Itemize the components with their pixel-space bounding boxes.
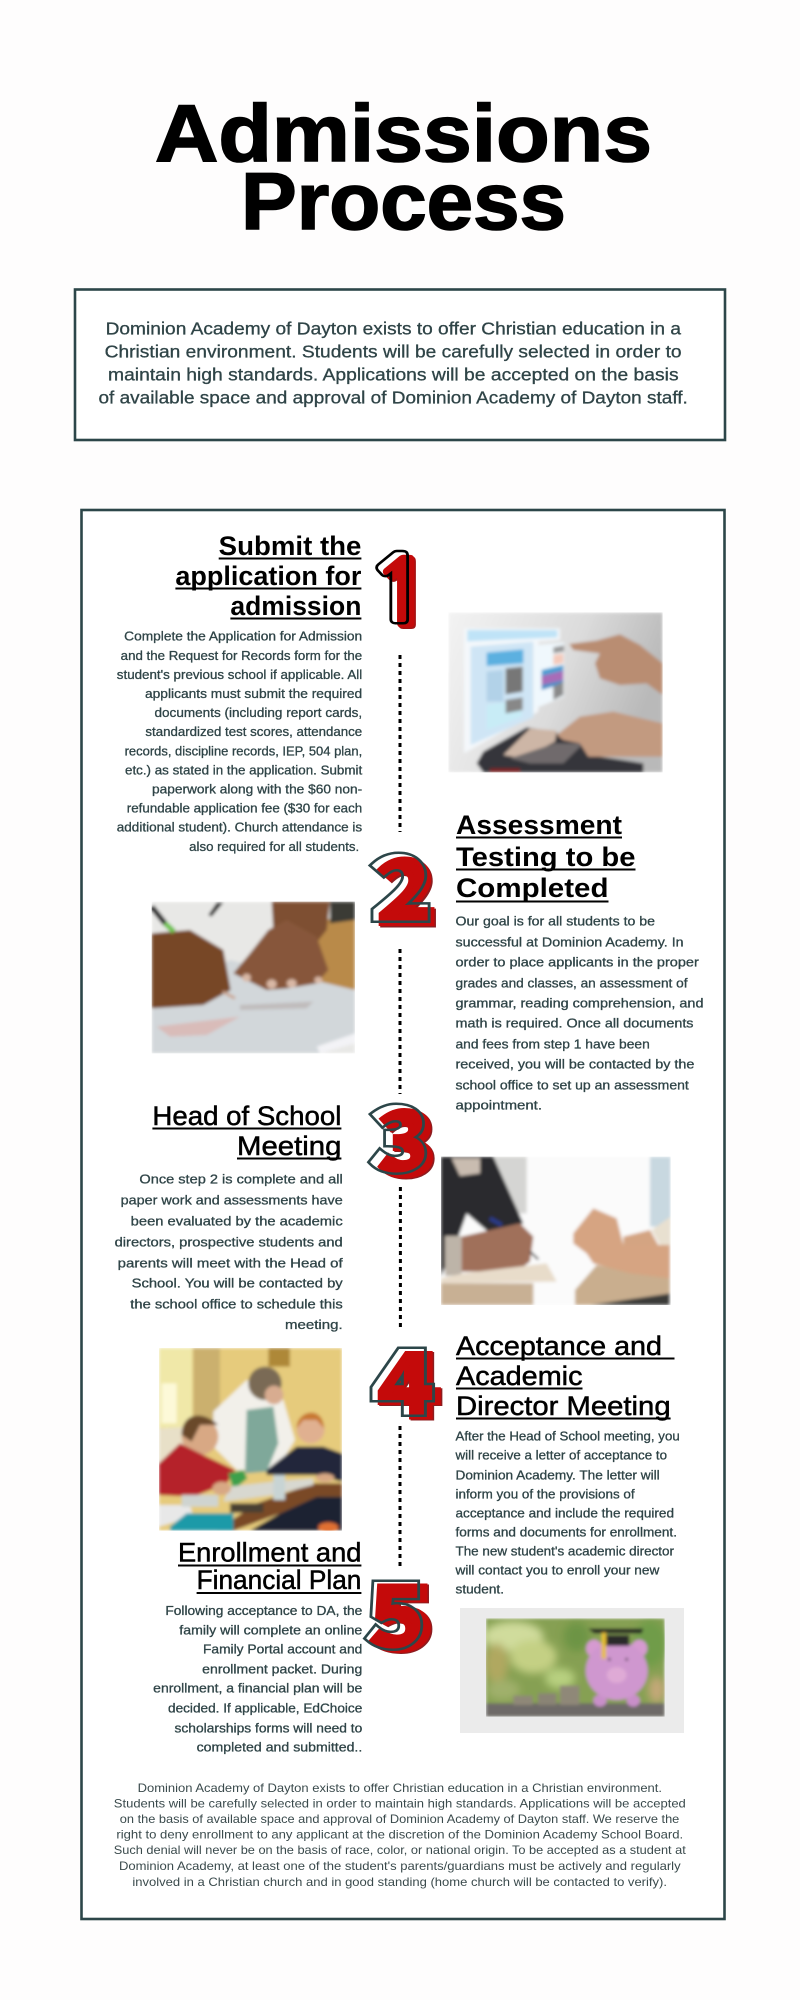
footer statement: Such denial will never be on the basis of race, color, or national origin. To be accepted as a student at (114, 1844, 687, 1857)
numeral 5: 5 (372, 1550, 434, 1675)
title (155, 89, 652, 247)
numeral 3: 3 (380, 1076, 436, 1200)
step 4 heading: Acceptance and (456, 1331, 662, 1361)
step 2 body text: school office to set up an assessment (456, 1077, 689, 1092)
numeral 4: 4 (379, 1316, 440, 1442)
step 2 body text: received, you will be contacted by the (456, 1056, 694, 1071)
footer statement: involved in a Christian church and in good standing (home church will be contacted to verify). (132, 1876, 667, 1889)
photo: teacher with two students at a table (159, 1348, 342, 1532)
step 5 body text: Family Portal account and (203, 1642, 362, 1657)
step 2 body text: appointment. (456, 1097, 542, 1112)
intro box: maintain high standards. Applications will be accepted on the basis (108, 364, 679, 384)
step 1 body text: etc.) as stated in the application. Submit (125, 762, 363, 777)
step 2 body text: order to place applicants in the proper (456, 955, 700, 970)
step 3 body text: been evaluated by the academic (131, 1213, 343, 1228)
title: Admissions (155, 89, 652, 179)
step 1 body text: also required for all students. (189, 839, 359, 854)
step 3 body text (115, 1171, 343, 1332)
numeral 4 (370, 1346, 442, 1420)
step 3 heading: Meeting (237, 1131, 341, 1161)
step 1 body text: additional student). Church attendance is (117, 820, 363, 835)
panel: admissions steps (82, 510, 724, 1919)
step 3 body text: directors, prospective students and (115, 1234, 343, 1249)
numeral 1: 1 (375, 552, 435, 640)
step 2 heading: Testing to be (456, 842, 636, 872)
step 5 body text: Following acceptance to DA, the (165, 1603, 362, 1618)
step 4 body text: will receive a letter of acceptance to (454, 1448, 667, 1463)
photo: hands on laptop with floating screen (448, 612, 663, 772)
step 1 body text: applicants must submit the required (145, 686, 362, 701)
step 1 body text (117, 629, 363, 854)
intro box (75, 290, 725, 440)
numeral 4: 4 (372, 1313, 433, 1438)
step 5 body text: completed and submitted.. (197, 1740, 362, 1755)
step 2 body text: Our goal is for all students to be (456, 914, 655, 929)
step 4 body text: Dominion Academy. The letter will (456, 1467, 660, 1482)
photo: piggy bank with graduation cap and coins (460, 1608, 684, 1733)
numeral 5: 5 (370, 1549, 433, 1674)
step 3 heading (152, 1101, 341, 1161)
footer statement: Dominion Academy, at least one of the student's parents/guardians must be actively and regularly (119, 1860, 681, 1873)
step 4 heading: Academic (456, 1361, 582, 1391)
step 3 body text: meeting. (285, 1317, 343, 1332)
step 1 heading: Submit the (219, 531, 361, 561)
numeral 5 (362, 1580, 432, 1654)
step 2 heading: Completed (456, 873, 608, 903)
numeral 3: 3 (370, 1070, 428, 1195)
numeral 5: 5 (366, 1546, 424, 1671)
step 4 body text: will contact you to enroll your new (454, 1563, 660, 1578)
step 2 heading: Assessment (456, 810, 622, 840)
footer statement: right to deny enrollment to any applicant at the discretion of the Dominion Academy School Board. (116, 1829, 683, 1842)
step 4 heading (456, 1331, 674, 1421)
step 3 body text: parents will meet with the Head of (118, 1255, 343, 1270)
numeral 3: 3 (379, 1074, 435, 1200)
numeral 2 (368, 852, 436, 928)
step 1 body text: student's previous school if applicable. All (117, 667, 362, 682)
step 1 heading: admission (230, 591, 361, 621)
step 1 heading: application for (175, 561, 361, 591)
numeral 2: 2 (378, 823, 436, 948)
numeral 3 (366, 1102, 435, 1180)
step 3 body text: School. You will be contacted by (132, 1276, 343, 1290)
step 5 body text: enrollment packet. During (202, 1661, 362, 1676)
step 5 body text: enrollment, a financial plan will be (153, 1681, 362, 1696)
step 1 body text: records, discipline records, IEP, 504 plan, (125, 743, 362, 758)
step 2 body text: successful at Dominion Academy. In (456, 935, 684, 950)
intro box: Dominion Academy of Dayton exists to offer Christian education in a (106, 318, 681, 338)
footer statement: Dominion Academy of Dayton exists to offer Christian education in a Christian environment. (138, 1782, 662, 1795)
step 1 body text: paperwork along with the $60 non- (152, 782, 362, 796)
step 5 heading: Financial Plan (197, 1565, 361, 1595)
step 1 body text: standardized test scores, attendance (145, 724, 362, 739)
step 5 body text: family will complete an online (179, 1623, 362, 1638)
intro box: Christian environment. Students will be carefully selected in order to (105, 342, 682, 362)
step 4 body text: inform you of the provisions of (456, 1486, 635, 1501)
step 4 body text: After the Head of School meeting, you (456, 1429, 680, 1444)
step 2 heading (456, 810, 636, 903)
step 5 body text: scholarships forms will need to (174, 1721, 362, 1736)
numeral 1: 1 (374, 551, 434, 638)
dotted timeline (398, 655, 402, 1569)
step 3 heading: Head of School (152, 1101, 341, 1131)
footer statement: on the basis of available space and approval of Dominion Academy of Dayton staff. We reserve the (120, 1813, 679, 1826)
step 4 body text: forms and documents for enrollment. (456, 1524, 677, 1539)
step 4 body text: student. (456, 1582, 504, 1597)
title: Process (241, 157, 566, 247)
step 2 body text (456, 914, 704, 1112)
step 1 body text: Complete the Application for Admission (124, 629, 362, 644)
footer statement (114, 1782, 687, 1889)
step 1 body text: documents (including report cards, (154, 705, 362, 720)
numeral 1: 1 (367, 547, 427, 634)
numeral 2: 2 (380, 824, 438, 950)
step 2 body text: grades and classes, an assessment of (456, 975, 688, 990)
step 5 heading: Enrollment and (178, 1538, 361, 1568)
step 5 body text (153, 1603, 362, 1755)
step 4 body text: acceptance and include the required (456, 1505, 674, 1520)
footer statement: Students will be carefully selected in order to maintain high standards. Applications will be accepted (114, 1798, 686, 1811)
numeral 2: 2 (371, 819, 431, 944)
step 4 heading: Director Meeting (456, 1391, 671, 1421)
step 5 heading (178, 1538, 361, 1595)
step 3 body text: Once step 2 is complete and all (139, 1171, 343, 1186)
step 4 body text: The new student's academic director (456, 1543, 675, 1558)
step 1 heading (175, 531, 361, 621)
step 4 body text (454, 1429, 680, 1597)
numeral 4: 4 (380, 1318, 442, 1442)
step 5 body text: decided. If applicable, EdChoice (168, 1701, 362, 1716)
photo: two people meeting at a table (441, 1157, 671, 1305)
step 1 body text: refundable application fee ($30 for each (127, 801, 362, 816)
step 2 body text: grammar, reading comprehension, and (456, 995, 704, 1010)
step 3 body text: paper work and assessments have (121, 1192, 343, 1207)
step 3 body text: the school office to schedule this (130, 1296, 343, 1312)
photo: student writing on paper (152, 902, 355, 1053)
step 1 body text: and the Request for Records form for the (121, 648, 362, 663)
step 2 body text: and fees from step 1 have been (456, 1036, 650, 1051)
step 2 body text: math is required. Once all documents (456, 1016, 694, 1031)
intro box: of available space and approval of Dominion Academy of Dayton staff. (98, 388, 688, 408)
